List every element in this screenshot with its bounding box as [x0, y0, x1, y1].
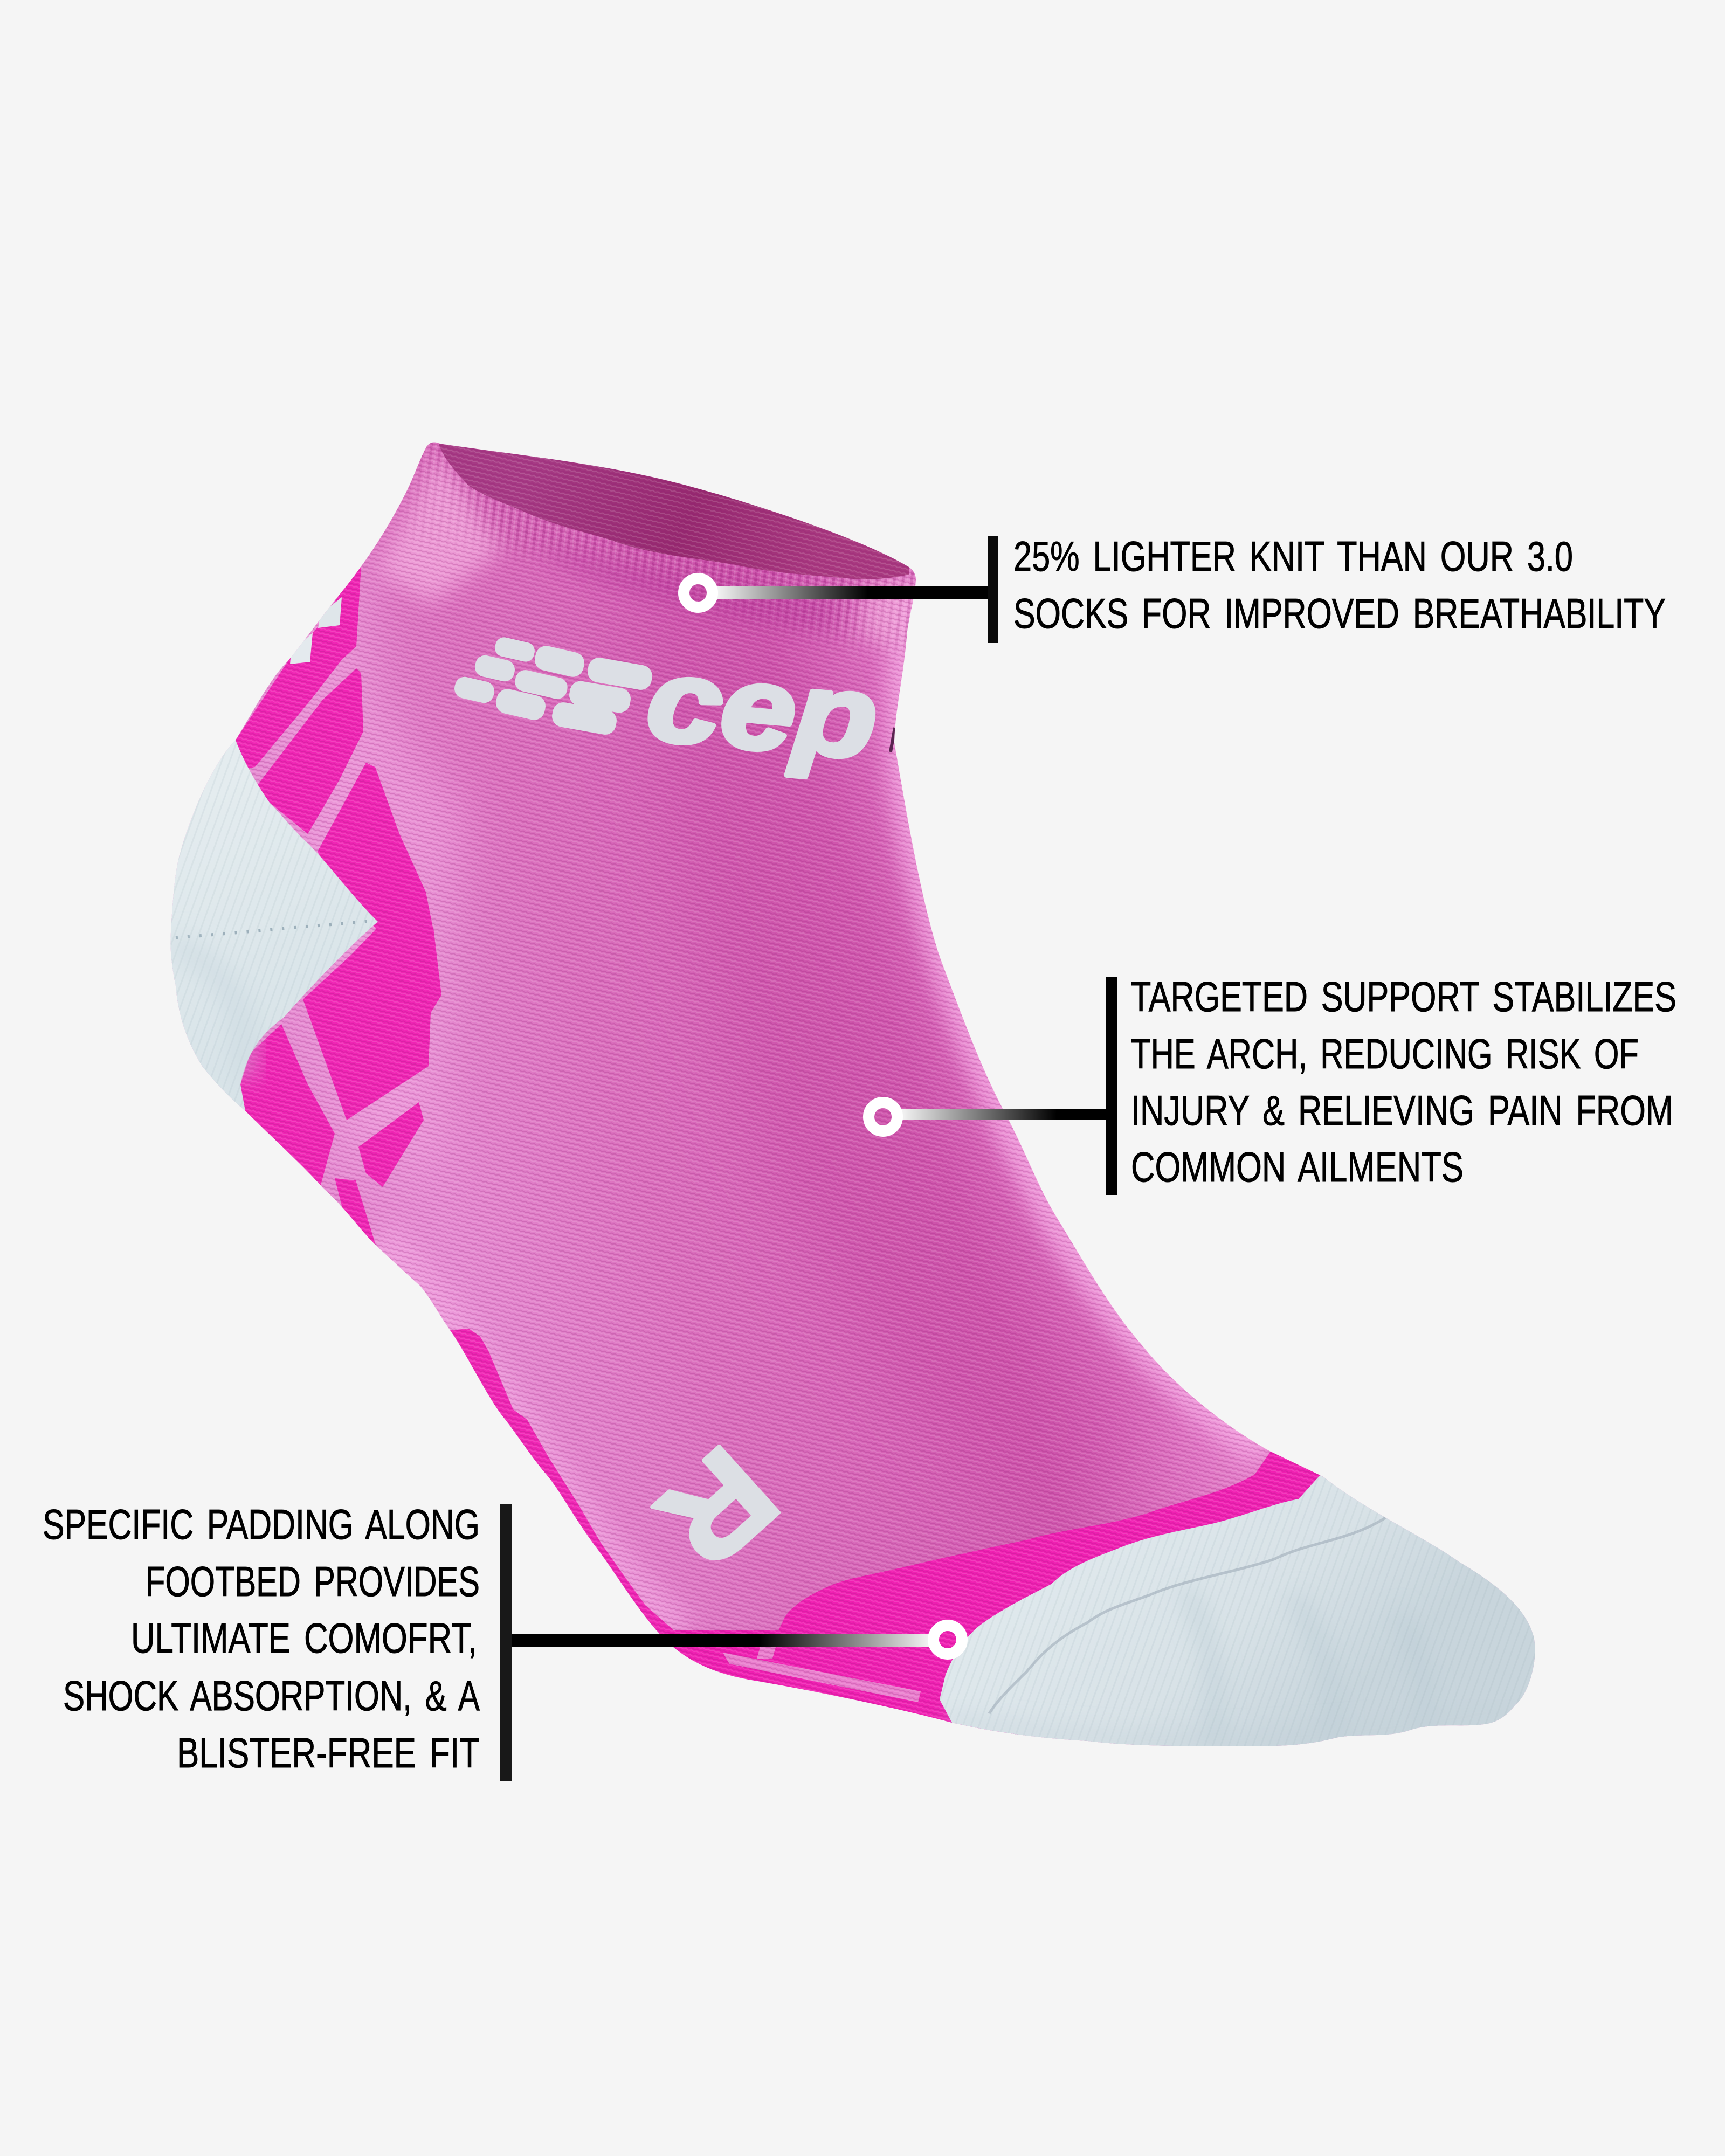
sock body: [135, 420, 1617, 1789]
vertical bar: [988, 536, 998, 643]
marker ring: [934, 1626, 962, 1654]
knit texture overlay: [135, 420, 1590, 1779]
vertical bar: [500, 1504, 512, 1781]
connector line: [901, 1109, 1112, 1120]
brand logo: cep with dots: cep: [643, 633, 882, 783]
brand logo: cep with dots: [452, 633, 882, 783]
sock product illustration: [170, 442, 1535, 1746]
light stitched strips in footbed: [723, 1647, 921, 1702]
heel cap: [135, 597, 378, 1132]
callout text: SHOCK ABSORPTION, & A: [63, 1672, 480, 1719]
callout: footbed padding: [43, 1501, 962, 1781]
size mark R: R: [632, 1420, 804, 1595]
marker ring: [869, 1103, 897, 1131]
callout text: [1013, 533, 1666, 637]
callout text: SPECIFIC PADDING ALONG: [43, 1501, 480, 1548]
callout: lighter knit: [684, 533, 1666, 643]
bright band before toe and under footbed: [647, 1452, 1331, 1779]
toe cap: [940, 1455, 1617, 1789]
callout text: FOOTBED PROVIDES: [146, 1558, 480, 1605]
ribbed cuff: [323, 420, 970, 701]
connector line: [717, 586, 992, 599]
callout text: BLISTER-FREE FIT: [177, 1729, 480, 1777]
callout text: [43, 1501, 480, 1777]
callout: arch support: [869, 973, 1676, 1195]
marker ring: [684, 579, 713, 607]
callout text: ULTIMATE COMOFRT,: [131, 1614, 477, 1662]
callout text: [1131, 973, 1676, 1191]
cuff opening interior: [439, 444, 909, 579]
callout text: 25% LIGHTER KNIT THAN OUR 3.0: [1013, 533, 1573, 580]
vertical bar: [1106, 977, 1117, 1195]
bright support panels: heel and arch: [236, 566, 673, 1676]
far-side sliver at ankle: [891, 728, 895, 752]
connector line: [507, 1634, 930, 1647]
callout text: COMMON AILMENTS: [1131, 1143, 1464, 1191]
